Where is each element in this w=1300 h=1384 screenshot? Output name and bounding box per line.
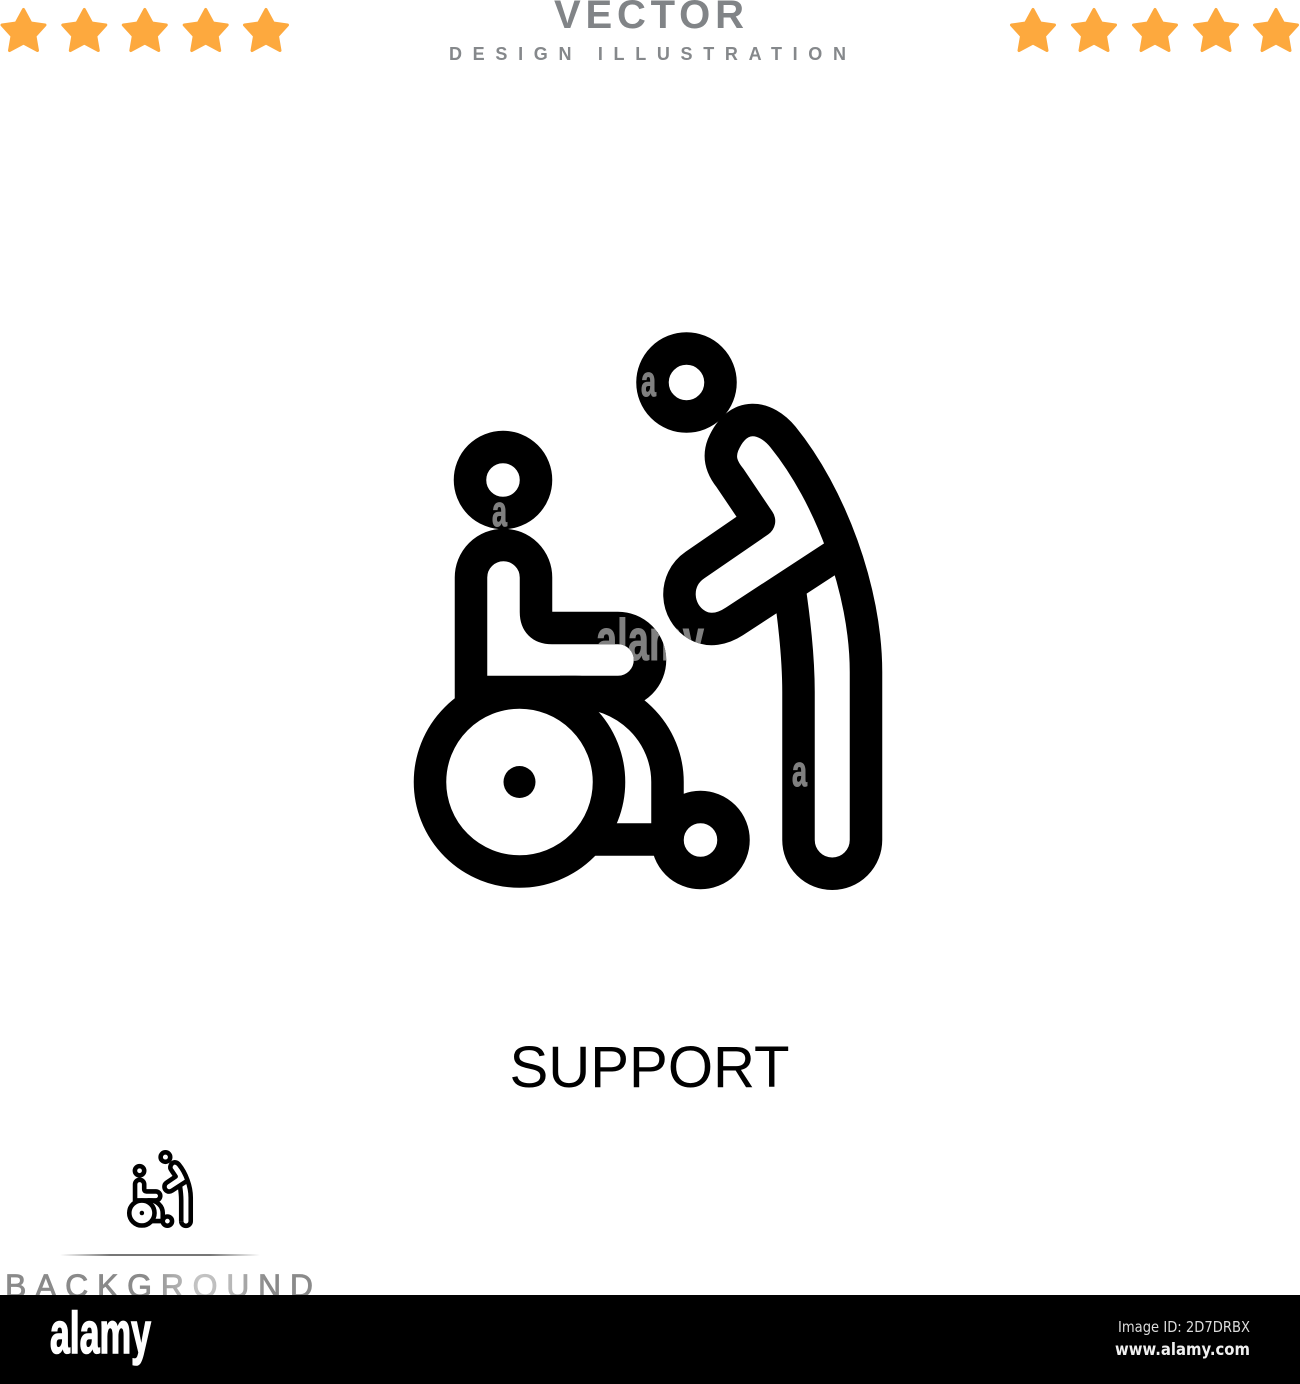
header: DESIGN ILLUSTRATION: DESIGN ILLUSTRATION [449, 44, 846, 64]
main icon: wheelchair user and helper [430, 348, 866, 874]
watermark on icon [492, 357, 807, 796]
icon: small front wheel [668, 807, 734, 873]
watermark on icon: alamy [596, 608, 704, 673]
label: SUPPORT: SUPPORT [510, 1035, 790, 1100]
icon: helper head [652, 348, 720, 416]
watermark on icon: a [641, 357, 656, 406]
icon: seated person body [471, 545, 650, 705]
footer: website: www.alamy.com [1115, 1340, 1250, 1360]
icon: seated person head [470, 447, 536, 513]
star rating: left [2, 10, 288, 50]
star rating: right [1012, 10, 1298, 50]
small icon thumbnail [129, 1152, 191, 1226]
footer: image id: Image ID: 2D7DRBX [1118, 1318, 1250, 1336]
icon: wheelchair frame [560, 692, 668, 840]
icon: helper inner leg [789, 585, 798, 840]
footer band [0, 1295, 1300, 1384]
footer logo: alamy: alamy [50, 1301, 151, 1366]
watermark on icon: a [492, 487, 507, 536]
icon: wheel hub [504, 766, 536, 798]
label: BACKGROUND: BACKGROUND [5, 1268, 313, 1304]
icon: helper body and arm [679, 420, 866, 874]
icon: large wheel [430, 692, 609, 872]
watermark on icon: a [792, 747, 807, 796]
